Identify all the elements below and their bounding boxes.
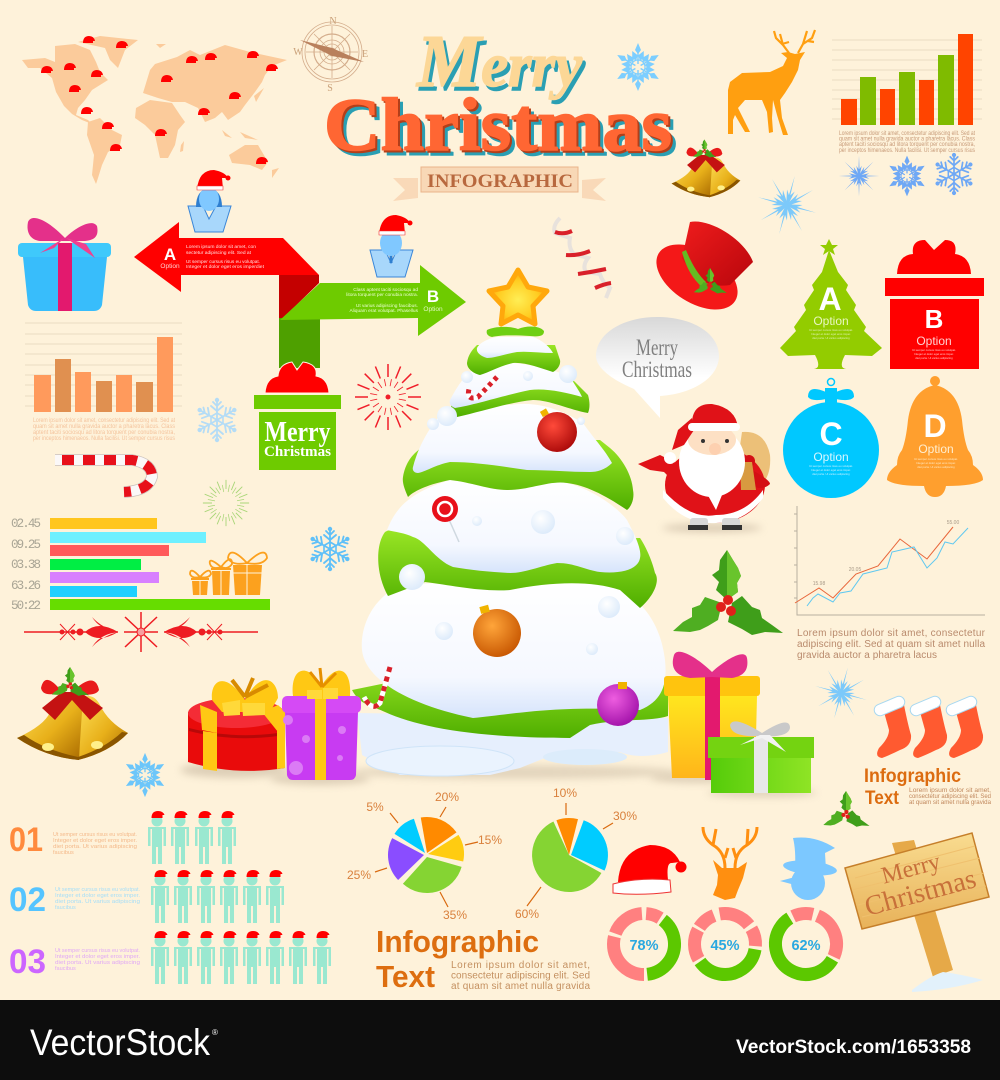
numbered row 03: 03 <box>9 943 46 981</box>
icon: red streamer <box>554 218 611 298</box>
pie chart two <box>515 786 637 921</box>
option B: red gift: Integer et dolor eget eros imper. <box>914 352 954 356</box>
bar chart: left <box>25 323 182 412</box>
pie chart one: 20% <box>435 790 459 804</box>
green tier 1 <box>403 440 633 510</box>
horizontal bar chart: 50:22 <box>11 599 41 613</box>
option C: blue ornament: Integer et dolor eget eros imper. <box>811 468 851 472</box>
icon: purple gift <box>270 668 370 785</box>
icon: man with santa hat <box>370 215 413 277</box>
text block: infographic text large: Text <box>376 959 435 994</box>
text block: infographic text small: Lorem ipsum dolor sit amet, <box>909 788 991 794</box>
icon: small holly <box>823 791 870 827</box>
icon: green gift Merry Christmas: Merry <box>264 417 330 448</box>
option B: red gift: diet porta. Ut varius adipiscing <box>915 356 953 360</box>
arrow: green option B: Option <box>423 306 443 313</box>
green cap <box>487 327 544 337</box>
option D: orange bell: Option <box>918 442 954 456</box>
icon: three orange gifts <box>190 553 267 595</box>
numbered row 01: faucibus <box>53 850 74 856</box>
title: Christmas: Christmas <box>329 89 677 172</box>
arrow: red option A: Integer et dolor eget eros imperdiet <box>186 264 265 270</box>
donut chart 62%: 62% <box>791 938 821 954</box>
icon: compass rose: W <box>293 47 303 58</box>
world map with santa hat markers <box>22 36 287 184</box>
text block: line chart caption: Lorem ipsum dolor sit amet, consectetur <box>797 628 986 639</box>
line chart: 15.98 <box>813 581 825 587</box>
footer bar: VectorStock.com/1653358 <box>736 1037 971 1058</box>
numbered row 03: diet porta. Ut varius adipiscing <box>55 960 140 966</box>
option A: green tree: diet porta. Ut varius adipiscing <box>812 336 850 340</box>
arrow: red option A: A <box>164 245 176 264</box>
text block: left bar chart caption: per inceptos himenaeos. Nulla facilisi. Ut semper cursus risus <box>33 435 175 442</box>
icon: candy cane <box>55 460 152 492</box>
icons: three blue snowflakes <box>839 153 975 196</box>
candy cane at base <box>364 667 390 706</box>
icon: blue gift <box>18 218 111 311</box>
banner: infographic ribbon: INFOGRAPHIC <box>427 171 573 192</box>
icon: snowflake <box>612 43 664 91</box>
numbered row 02: faucibus <box>55 905 76 911</box>
numbered row 01: Ut semper cursus risus eu volutpat. <box>53 832 137 838</box>
icon: santa hat silhouette <box>613 845 686 894</box>
decorative red ornament divider <box>24 612 258 652</box>
ornament red <box>537 408 577 452</box>
icon: holly <box>673 550 783 635</box>
icon: wooden sign: Christmas <box>861 863 980 923</box>
text block: bar chart caption: quam sit amet nulla gravida auctor a pharetra lacus. Class <box>839 136 975 142</box>
numbered row 03: faucibus <box>55 966 76 972</box>
icon: snowflake blue <box>308 527 352 571</box>
numbered row 02: Integer et dolor eget eros imper. <box>55 893 140 899</box>
numbered row 03: Ut semper cursus risus eu volutpat. <box>55 948 140 954</box>
text block: infographic text large: consectetur adipiscing elit. Sed <box>451 970 590 982</box>
small candy cane <box>468 377 497 398</box>
icon: red round gift <box>180 678 290 778</box>
text block: left bar chart caption: Lorem ipsum dolor sit amet, consectetur adipiscing elit. Sed at <box>33 417 175 424</box>
icon: orange reindeer <box>728 30 815 135</box>
numbered row 01: Integer et dolor eget eros imper. <box>53 838 137 844</box>
tree shadow <box>350 765 680 779</box>
icon: firework red <box>355 364 421 430</box>
snow ground <box>357 713 668 775</box>
arrow: green option B: litora torquent per conubia nostra. <box>346 292 418 298</box>
numbered row 02: diet porta. Ut varius adipiscing <box>55 899 140 905</box>
arrow: red option A: Ut semper cursus risus eu volutpat. <box>186 259 260 265</box>
donut chart 78% <box>601 901 687 987</box>
option A: green tree: Option <box>813 314 849 328</box>
option D: orange bell: diet porta. Ut varius adipiscing <box>917 465 955 469</box>
snow lump right <box>543 749 627 765</box>
icon: yellow gift <box>650 652 760 783</box>
snow tier 4 <box>450 363 582 408</box>
speech bubble Merry Christmas: Merry <box>636 335 678 360</box>
title: Merry: Merry <box>416 21 582 103</box>
arrow: red option A: Lorem ipsum dolor sit amet, con <box>186 244 256 250</box>
footer bar: ® <box>212 1028 218 1037</box>
lollipop <box>432 496 459 542</box>
numbered row 01: 01 <box>9 821 43 859</box>
title: Christmas: Christmas <box>326 86 674 169</box>
option D: orange bell: Integer et dolor eget eros imper. <box>916 461 956 465</box>
text block: bar chart caption <box>839 130 975 154</box>
icon: snowflake star small <box>809 661 873 725</box>
text block: infographic text small <box>864 766 992 809</box>
green tier 0 <box>451 377 590 417</box>
numbered row 03 <box>9 931 331 984</box>
title: Merry: Merry <box>419 25 585 107</box>
bottom green tier <box>352 660 668 738</box>
green tier top <box>467 345 560 375</box>
horizontal bar chart: 03.38 <box>11 558 41 572</box>
line chart: 55.00 <box>947 520 959 526</box>
icon: compass rose <box>293 16 368 94</box>
text block: line chart caption: gravida auctor a pharetra lacus <box>797 650 937 661</box>
numbered row 03: Integer et dolor eget eros imper. <box>55 954 140 960</box>
icon: snowflake blue small <box>121 753 169 797</box>
christmas tree <box>350 270 680 779</box>
numbered row 02: 02 <box>9 881 46 919</box>
donut chart 45%: 45% <box>710 938 740 954</box>
option C: blue ornament: diet porta. Ut varius adipiscing <box>812 472 850 476</box>
icon: green gift with white ribbon <box>707 721 817 797</box>
icon: firework green <box>203 480 249 526</box>
numbered row 01 <box>9 811 236 864</box>
pie chart one: 5% <box>366 800 384 814</box>
text block: infographic text large: Lorem ipsum dolor sit amet, <box>451 960 590 971</box>
icon: golden bells top <box>672 140 740 197</box>
icon: reindeer head silhouette <box>703 827 757 900</box>
pie chart two: 30% <box>613 809 637 823</box>
speech bubble Merry Christmas: Christmas <box>622 357 692 382</box>
pie chart one: 35% <box>443 908 467 922</box>
icon: wooden sign <box>845 833 989 992</box>
star topper <box>489 270 547 324</box>
option A: green tree: Ut semper cursus risus eu volutpat. <box>809 328 853 332</box>
numbered row 02: Ut semper cursus risus eu volutpat. <box>55 887 140 893</box>
icon: snowman silhouette <box>780 837 838 900</box>
big snow tier bottom <box>362 582 666 718</box>
option B: red gift: Option <box>916 334 952 348</box>
text block: line chart caption <box>797 628 986 661</box>
option C: blue ornament: Ut semper cursus risus eu volutpat. <box>809 464 853 468</box>
arrow: green option B: B <box>427 287 439 306</box>
text block: bar chart caption: aptent taciti sociosqu ad litora torquent per conubia nostra, <box>839 141 975 148</box>
text block: infographic text large: at quam sit amet nulla gravida <box>451 981 590 992</box>
text block: infographic text small: Infographic <box>864 766 961 787</box>
arrow: red option A: Option <box>160 263 180 270</box>
snow lump left <box>366 746 514 776</box>
icon: golden bells left <box>17 667 128 760</box>
icon: snowflake outline <box>195 398 239 442</box>
text block: infographic text large <box>376 924 590 994</box>
pie chart one <box>347 790 502 922</box>
option D: orange bell: Ut semper cursus risus eu volutpat. <box>914 457 958 461</box>
icons: three stockings <box>877 702 983 758</box>
icon: snowflake star <box>750 168 824 242</box>
horizontal bar chart: 63.26 <box>11 579 41 593</box>
numbered row 01: diet porta. Ut varius adipiscing <box>53 844 137 850</box>
arrow: green option B: Class aptent taciti sociosqu ad <box>353 287 418 293</box>
pie chart two: 60% <box>515 907 539 921</box>
option B: red gift: Ut semper cursus risus eu volutpat. <box>912 348 956 352</box>
option A: green tree <box>780 239 882 369</box>
title: Christmas: Christmas <box>324 84 672 167</box>
arrow: green option B: Ut varius adipiscing faucibus. <box>356 303 418 309</box>
text block: infographic text large: Infographic <box>376 924 539 959</box>
option A: green tree: A <box>818 281 842 317</box>
footer bar <box>0 1000 1000 1080</box>
option C: blue ornament <box>783 378 879 498</box>
snow tier 5 <box>477 337 553 358</box>
donut chart 78%: 78% <box>629 938 659 954</box>
option C: blue ornament: C <box>819 416 843 452</box>
icon: wooden sign: Merry <box>879 849 943 890</box>
line chart <box>794 506 985 615</box>
numbered row 02 <box>9 870 284 923</box>
icon: red top hat with holly <box>645 222 753 323</box>
arrow: red option A <box>134 222 319 322</box>
horizontal bar chart: 02.45 <box>11 517 41 531</box>
icon: green gift Merry Christmas: Christmas <box>264 444 331 460</box>
option C: blue ornament: Option <box>813 450 849 464</box>
bar chart: top right <box>832 34 982 125</box>
snowballs <box>399 365 634 655</box>
banner: infographic ribbon <box>393 167 606 201</box>
text block: infographic text small: at quam sit amet nulla gravida <box>909 800 992 806</box>
pie chart one: 15% <box>478 833 502 847</box>
horizontal bar chart <box>11 517 270 613</box>
speech bubble Merry Christmas <box>596 317 719 418</box>
donut chart 62% <box>764 902 848 986</box>
arrow: red option A: sectetur adipiscing elit. Sed at <box>186 250 252 256</box>
icon: santa claus <box>638 404 770 532</box>
line chart: 20.05 <box>849 567 861 573</box>
arrow: green option B <box>279 265 466 368</box>
option A: green tree: Integer et dolor eget eros imper. <box>811 332 851 336</box>
donut chart 45% <box>683 902 767 986</box>
text block: left bar chart caption: aptent taciti sociosqu ad litora torquent per conubia nostra, <box>33 429 175 436</box>
option B: red gift <box>885 240 984 369</box>
option B: red gift: B <box>925 304 943 334</box>
snow tier 2 <box>387 480 640 573</box>
ornament purple <box>597 682 639 726</box>
icon: compass rose: E <box>362 49 368 60</box>
ornament orange <box>473 605 521 657</box>
option D: orange bell: D <box>923 408 947 444</box>
green tier 2 <box>378 529 657 608</box>
icon: green gift Merry Christmas <box>254 362 341 470</box>
icon: compass rose: S <box>327 83 333 94</box>
text block: infographic text small: Text <box>865 788 900 809</box>
icon: woman with santa hat <box>188 170 231 232</box>
footer bar: VectorStock <box>30 1022 210 1063</box>
text block: line chart caption: adipiscing elit. Sed at quam sit amet nulla <box>797 639 985 650</box>
horizontal bar chart: 09.25 <box>11 538 41 552</box>
icon: compass rose: N <box>329 16 337 27</box>
snow tier 3 <box>413 404 612 473</box>
pie chart two: 10% <box>553 786 577 800</box>
text block: left bar chart caption <box>33 417 175 442</box>
pie chart one: 25% <box>347 868 371 882</box>
option D: orange bell <box>887 376 983 497</box>
text block: infographic text small: consectetur adipiscing elit. Sed <box>909 794 991 800</box>
text block: left bar chart caption: quam sit amet nulla gravida auctor a pharetra lacus. Class <box>33 423 175 430</box>
arrow: green option B: Aliquam erat volutpat. Phasellus <box>349 308 419 314</box>
